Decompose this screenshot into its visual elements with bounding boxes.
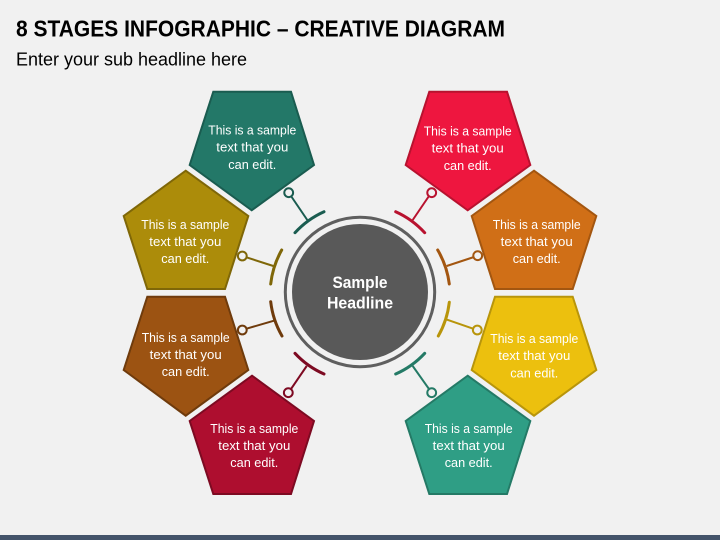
- center circle: Headline: [327, 294, 393, 313]
- title: 8 STAGES INFOGRAPHIC – CREATIVE DIAGRAM: [16, 16, 505, 42]
- stage 7: yellow pentagon: [472, 297, 596, 416]
- stage 3: brown pentagon: This is a sample: [142, 330, 230, 345]
- stage 5: red pentagon: [406, 92, 530, 210]
- stage 8: green pentagon: can edit.: [445, 455, 493, 470]
- connector: yellow: [438, 302, 482, 336]
- stage 2: olive pentagon: can edit.: [161, 251, 209, 266]
- stage 6: orange pentagon: [472, 171, 596, 289]
- connector: orange: [438, 250, 482, 284]
- stage 1: dark teal pentagon: text that you: [216, 140, 288, 155]
- stage 1: dark teal pentagon: This is a sample: [208, 123, 296, 138]
- stage 4: crimson pentagon: This is a sample: [210, 421, 298, 436]
- connector: dark teal: [284, 188, 324, 233]
- connector: olive: [238, 250, 282, 284]
- stage 8: green pentagon: [406, 376, 530, 494]
- stage 3: brown pentagon: [124, 297, 248, 416]
- stage 3: brown pentagon: text that you: [150, 347, 222, 362]
- stage 5: red pentagon: This is a sample: [424, 124, 512, 138]
- stage 7: yellow pentagon: can edit.: [510, 366, 558, 380]
- stage 6: orange pentagon: can edit.: [513, 251, 561, 266]
- stage 1: dark teal pentagon: can edit.: [228, 157, 276, 172]
- stage 2: olive pentagon: This is a sample: [141, 217, 229, 232]
- stage 4: crimson pentagon: text that you: [218, 438, 290, 453]
- connector: brown: [238, 302, 282, 336]
- stage 6: orange pentagon: This is a sample: [493, 217, 581, 232]
- stage 3: brown pentagon: can edit.: [162, 364, 210, 379]
- stage 8: green pentagon: This is a sample: [425, 421, 513, 436]
- stage 6: orange pentagon: text that you: [501, 234, 573, 249]
- connector: crimson: [284, 353, 324, 397]
- stage 7: yellow pentagon: text that you: [498, 348, 570, 363]
- center circle: Sample: [332, 273, 388, 292]
- connector: green: [396, 353, 436, 397]
- stage 1: dark teal pentagon: [190, 92, 314, 210]
- stage 2: olive pentagon: [124, 171, 248, 289]
- connector: red: [396, 188, 436, 233]
- stage 4: crimson pentagon: can edit.: [230, 455, 278, 470]
- stage 5: red pentagon: text that you: [432, 140, 504, 156]
- subtitle: Enter your sub headline here: [16, 50, 247, 70]
- stage 8: green pentagon: text that you: [433, 438, 505, 453]
- stage 5: red pentagon: can edit.: [444, 158, 492, 173]
- stage 4: crimson pentagon: [190, 376, 314, 494]
- stage 7: yellow pentagon: This is a sample: [490, 331, 578, 346]
- center circle: [285, 217, 435, 367]
- stage 2: olive pentagon: text that you: [149, 234, 221, 249]
- bottom bar: [0, 535, 720, 540]
